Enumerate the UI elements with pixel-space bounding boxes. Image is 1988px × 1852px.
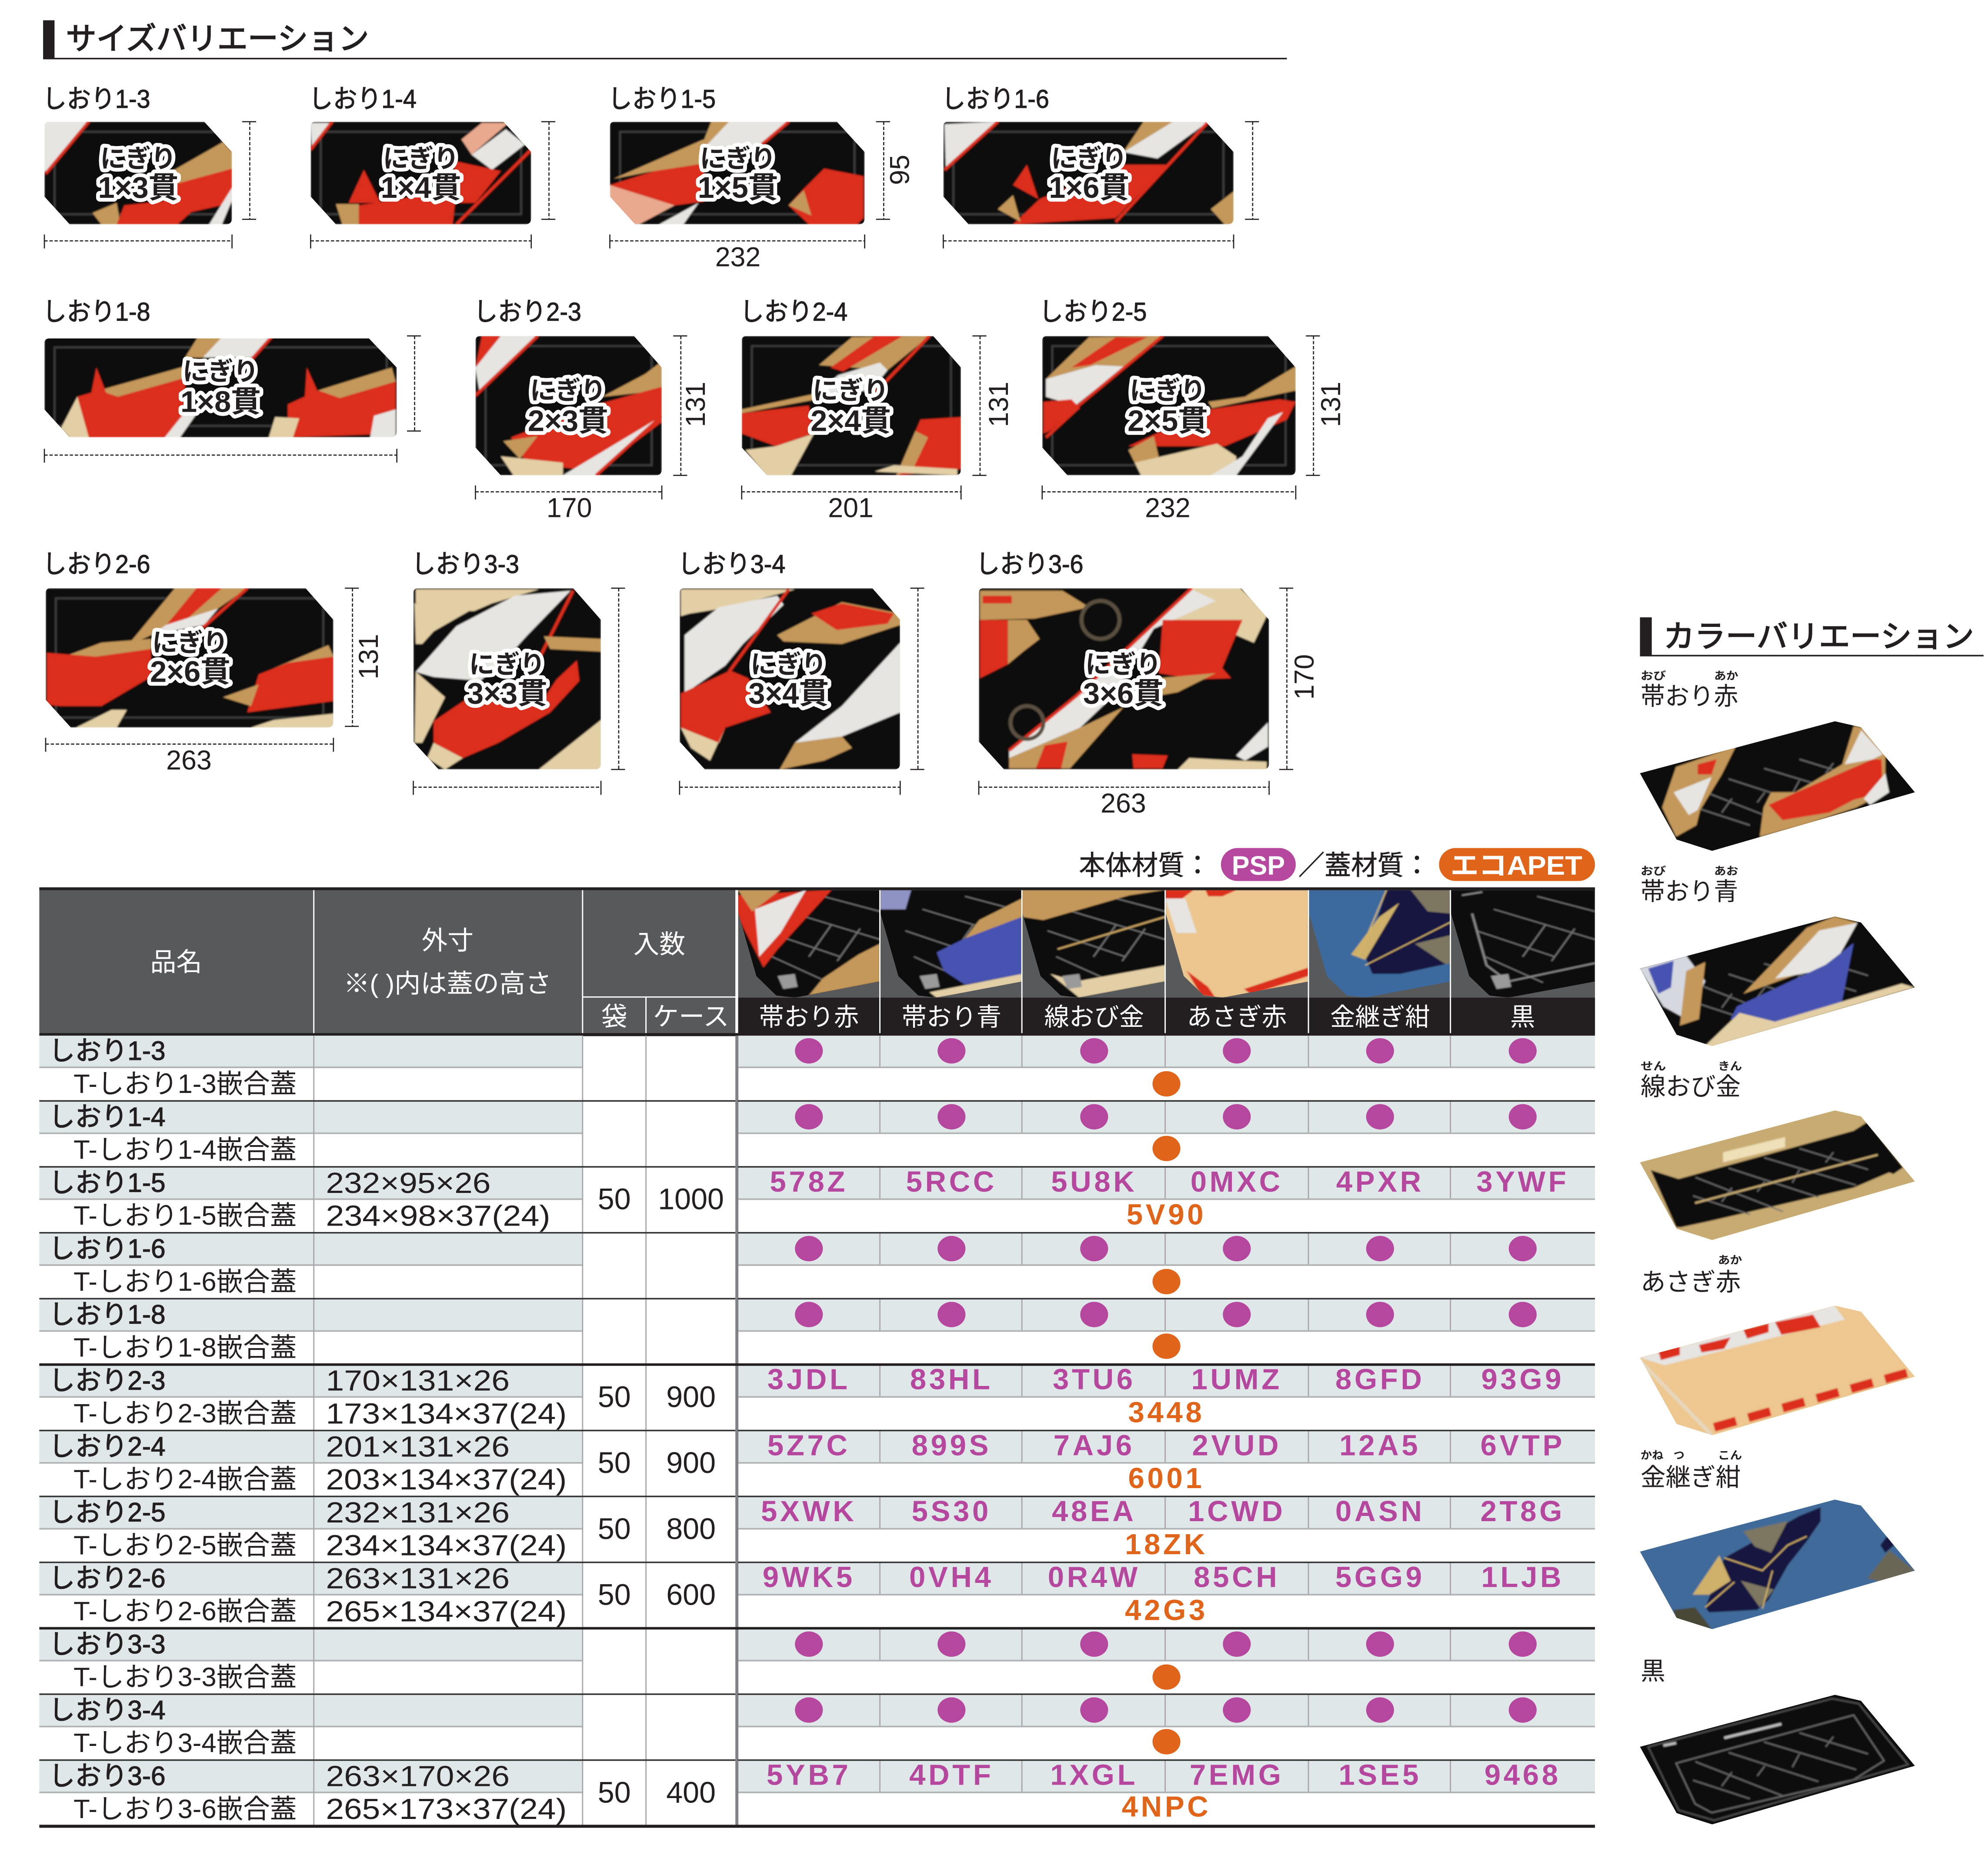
product codes: 5Z7C (767, 1429, 851, 1462)
availability dots (795, 1302, 1537, 1359)
colour item: 帯おり青: 帯おり青 (1641, 878, 1738, 906)
size item: しおり3-3: しおり3-3 (411, 550, 519, 579)
row: しおり2-3: 170×131×26 (326, 1365, 510, 1397)
row: しおり2-6: T-しおり2-6嵌合蓋 (73, 1596, 297, 1626)
product codes: 5YB7 (767, 1759, 851, 1791)
badge: PSP: PSP (1232, 851, 1285, 880)
row: しおり1-5: 1000 (658, 1183, 724, 1216)
product codes: 899S (912, 1429, 991, 1462)
colour item: 黒: 黒 (1641, 1658, 1665, 1685)
width dimension 263 (979, 781, 1269, 819)
header label: 入数: 入数 (633, 930, 685, 959)
depth dimension 131 (972, 336, 1014, 475)
row: しおり2-5: 800 (666, 1512, 716, 1546)
width dimension 232 (610, 234, 865, 272)
product codes: 3448 (1128, 1396, 1205, 1429)
row: しおり1-4 (49, 1102, 1537, 1165)
width dimension 170 (475, 486, 662, 523)
size item: しおり1-8: しおり1-8 (43, 297, 150, 326)
product codes: 4NPC (1122, 1790, 1211, 1823)
heading: colour variations: カラーバリエーション (1664, 620, 1974, 654)
thumbnail: 帯おり赤 (738, 890, 880, 998)
product codes: 5V90 (1127, 1199, 1206, 1231)
row: しおり1-5: 50 (598, 1183, 631, 1216)
tray label: にぎり (751, 650, 827, 679)
tray label (150, 629, 230, 689)
product codes: 1SE5 (1338, 1759, 1421, 1791)
product codes: 2T8G (1481, 1495, 1565, 1528)
product codes: 1LJB (1481, 1561, 1564, 1594)
thumbnail: 線おび金 (1022, 890, 1165, 998)
size item: しおり3-4 (678, 550, 924, 795)
product codes (763, 1561, 1564, 1626)
size item: しおり2-5 (1039, 297, 1346, 523)
tray label (528, 376, 608, 437)
tray photo: しおり3-3 (414, 588, 601, 769)
width dimension (680, 781, 900, 795)
tray label: にぎり (813, 376, 889, 405)
row: しおり2-3: 173×134×37(24) (326, 1397, 567, 1430)
row: しおり2-5: 50 (598, 1512, 631, 1546)
tray label (1083, 650, 1164, 710)
badge: エコAPET: エコAPET (1451, 851, 1582, 880)
row: しおり2-3 (49, 1363, 1564, 1430)
row: しおり2-3: 900 (666, 1381, 716, 1414)
tray label (180, 358, 261, 419)
colour item: 線おび金: せん (1641, 1060, 1666, 1073)
depth dimension 131: 131 (1316, 382, 1346, 427)
tray label: 2×6貫 (150, 655, 230, 689)
size item: しおり1-8 (43, 297, 421, 463)
row: しおり1-5: 234×98×37(24) (326, 1200, 550, 1232)
thumbnail: 帯おり青 (880, 890, 1022, 998)
width dimension 232 (1042, 486, 1296, 523)
material legend (1079, 848, 1595, 881)
row: しおり2-4: 50 (598, 1446, 631, 1479)
colour names: あさぎ赤 (1187, 1003, 1287, 1031)
badge: PSP (1221, 848, 1296, 881)
depth dimension 131: 131 (680, 382, 711, 427)
product codes: 3YWF (1476, 1166, 1569, 1198)
product codes: 5RCC (906, 1166, 997, 1198)
tray label: にぎり (100, 145, 176, 173)
header label: 袋: 袋 (601, 1002, 627, 1031)
width dimension 263: 263 (166, 745, 212, 776)
availability dots (795, 1632, 1537, 1690)
row: しおり2-4: 203×134×37(24) (326, 1463, 567, 1496)
width dimension (44, 449, 397, 463)
row: しおり3-6: 50 (598, 1776, 631, 1809)
width dimension 232: 232 (1145, 493, 1191, 523)
product codes: 48EA (1052, 1495, 1137, 1528)
row: しおり2-6: 265×134×37(24) (326, 1595, 567, 1628)
row: しおり2-5: しおり2-5 (49, 1498, 166, 1527)
product codes: 3TU6 (1053, 1363, 1136, 1396)
tray label: にぎり (530, 376, 606, 405)
depth dimension 170 (1279, 588, 1320, 769)
depth dimension (911, 588, 924, 769)
colour names: 線おび金 (1044, 1003, 1144, 1031)
colour item: 金継ぎ紺: かね (1641, 1449, 1664, 1462)
tray photo: 帯おり赤 (1635, 716, 1921, 856)
availability dots (795, 1236, 1537, 1294)
size item: しおり3-4: しおり3-4 (678, 550, 785, 579)
product codes: 7AJ6 (1054, 1429, 1135, 1462)
row: しおり1-5: 232×95×26 (326, 1167, 490, 1199)
tray photo: 帯おり青 (1635, 911, 1921, 1051)
row: しおり3-4: T-しおり3-4嵌合蓋 (73, 1728, 297, 1758)
depth dimension 131: 131 (354, 634, 384, 680)
row: しおり1-6 (49, 1234, 1537, 1296)
row: しおり1-5: T-しおり1-5嵌合蓋 (73, 1201, 297, 1230)
tray label: 1×8貫 (180, 385, 261, 419)
material legend: ／蓋材質： (1298, 850, 1430, 881)
product codes: 4DTF (909, 1759, 994, 1791)
row: しおり3-3: T-しおり3-3嵌合蓋 (73, 1662, 297, 1692)
colour item: 帯おり赤: 帯おり赤 (1641, 683, 1738, 710)
section: colour variations (1635, 617, 1984, 1829)
row: しおり3-3 (49, 1629, 1537, 1692)
product codes: 5U8K (1051, 1166, 1137, 1198)
row: しおり3-4 (49, 1695, 1537, 1758)
colour item: あさぎ赤: あさぎ赤 (1641, 1269, 1741, 1296)
tray photo: 黒 (1635, 1690, 1921, 1829)
row: しおり3-6: 265×173×37(24) (326, 1793, 567, 1825)
product codes (761, 1495, 1565, 1561)
row: しおり1-4: T-しおり1-4嵌合蓋 (73, 1135, 297, 1165)
product codes: 93G9 (1481, 1363, 1564, 1396)
heading: size variations: サイズバリエーション (66, 22, 369, 57)
row: しおり3-6: しおり3-6 (49, 1761, 166, 1791)
tray photo: あさぎ赤 (1635, 1301, 1921, 1440)
product codes: 0ASN (1335, 1495, 1425, 1528)
colour item: 金継ぎ紺: 金継ぎ紺 (1641, 1464, 1741, 1491)
tray photo: 線おび金 (1635, 1106, 1921, 1245)
product codes (767, 1759, 1561, 1823)
size item: しおり1-4 (309, 84, 555, 248)
tray label: にぎり (152, 629, 228, 657)
product codes: 578Z (770, 1166, 848, 1198)
width dimension (943, 234, 1234, 248)
row: しおり3-4: しおり3-4 (49, 1695, 166, 1725)
row: しおり1-5 (49, 1166, 1569, 1232)
colour item: 帯おり赤 (1635, 670, 1921, 856)
product codes (767, 1429, 1565, 1495)
product codes (770, 1166, 1569, 1231)
header label: 外寸: 外寸 (422, 926, 474, 955)
product codes: 7EMG (1190, 1759, 1284, 1791)
size item: しおり1-4: しおり1-4 (309, 84, 417, 113)
row: しおり2-6 (49, 1561, 1564, 1628)
tray label (1127, 376, 1208, 437)
depth dimension (407, 336, 421, 431)
row: しおり2-4: T-しおり2-4嵌合蓋 (73, 1465, 297, 1494)
row: しおり3-6: 263×170×26 (326, 1760, 510, 1792)
size item: しおり2-5: しおり2-5 (1039, 297, 1147, 326)
colour item: 線おび金: きん (1718, 1060, 1742, 1073)
colour item: 金継ぎ紺: つ (1674, 1449, 1684, 1462)
width dimension 201: 201 (828, 493, 874, 523)
tray label: 1×3貫 (98, 171, 178, 204)
tray photo: しおり2-4 (742, 336, 961, 475)
row: しおり2-5 (49, 1495, 1565, 1562)
product codes: 1UMZ (1191, 1363, 1282, 1396)
tray label: 3×6貫 (1083, 676, 1164, 710)
product codes (767, 1363, 1564, 1429)
tray label: 1×6貫 (1049, 171, 1129, 204)
colour item: 帯おり赤: おび (1641, 670, 1666, 682)
tray photo: しおり1-8 (44, 336, 397, 437)
width dimension 201 (742, 486, 961, 523)
tray photo: しおり2-6 (46, 588, 334, 728)
row: しおり1-3: T-しおり1-3嵌合蓋 (73, 1069, 297, 1099)
tray photo: しおり1-6 (943, 122, 1234, 224)
size item: しおり1-3 (43, 84, 256, 248)
colour item: 線おび金 (1635, 1060, 1921, 1245)
section: size variations (43, 20, 1346, 819)
size item: しおり2-3: しおり2-3 (474, 297, 581, 326)
spec table (39, 887, 1595, 1828)
tray photo: しおり1-3 (44, 122, 232, 224)
colour item: 金継ぎ紺 (1635, 1449, 1921, 1634)
tray label: にぎり (1085, 650, 1161, 679)
width dimension (310, 234, 531, 248)
width dimension 263 (46, 738, 334, 776)
colour names: 帯おり赤 (759, 1003, 859, 1031)
depth dimension 131 (345, 588, 384, 726)
size item: しおり2-4: しおり2-4 (740, 297, 847, 326)
size item: しおり3-3 (411, 550, 625, 795)
tray label: 2×3貫 (528, 404, 608, 437)
tray label (698, 145, 778, 204)
tray label: 1×5貫 (698, 171, 778, 204)
colour item: 黒 (1635, 1658, 1921, 1829)
tray label: 1×4貫 (381, 171, 461, 204)
tray label: にぎり (1130, 376, 1206, 405)
availability dots (795, 1104, 1537, 1161)
row: しおり2-4: しおり2-4 (49, 1432, 166, 1461)
row: しおり2-6: 50 (598, 1578, 631, 1611)
tray photo: しおり3-6 (979, 588, 1269, 769)
tray label: 3×4貫 (748, 676, 829, 710)
header note: ※( )内は蓋の高さ (344, 969, 551, 998)
product codes: 0MXC (1191, 1166, 1283, 1198)
row: しおり2-4 (49, 1429, 1565, 1496)
row: しおり1-4: しおり1-4 (49, 1102, 166, 1132)
size item: しおり1-3: しおり1-3 (43, 84, 150, 113)
row: しおり1-3 (49, 1036, 1537, 1099)
row: しおり1-6: しおり1-6 (49, 1234, 166, 1263)
tray photo: しおり1-4 (310, 122, 531, 224)
tray label: にぎり (1051, 145, 1127, 173)
tray label: にぎり (383, 145, 459, 173)
product codes: 9468 (1484, 1759, 1561, 1791)
thumbnail: 金継ぎ紺 (1308, 890, 1451, 998)
product codes: 9WK5 (763, 1561, 855, 1594)
tray photo: しおり2-3 (475, 336, 662, 475)
tray photo: しおり3-4 (680, 588, 900, 769)
product codes: 5S30 (912, 1495, 991, 1528)
colour item: 帯おり赤: あか (1714, 670, 1738, 682)
row: しおり3-6: T-しおり3-6嵌合蓋 (73, 1794, 297, 1824)
thumbnail: 黒 (1451, 890, 1595, 998)
size item: しおり1-5: しおり1-5 (608, 84, 716, 113)
tray photo: 金継ぎ紺 (1635, 1495, 1921, 1634)
tray label (748, 650, 829, 710)
tray label: にぎり (700, 145, 776, 173)
row: しおり2-3: 50 (598, 1381, 631, 1414)
row: しおり2-4: 900 (666, 1446, 716, 1479)
tray label (1049, 145, 1129, 204)
depth dimension (242, 122, 256, 219)
product codes: 12A5 (1339, 1429, 1421, 1462)
row: しおり3-3: しおり3-3 (49, 1629, 166, 1659)
product codes: 42G3 (1125, 1594, 1208, 1626)
row: しおり1-8 (49, 1300, 1537, 1362)
colour item: あさぎ赤: あか (1718, 1254, 1742, 1266)
colour item: 帯おり青 (1635, 865, 1921, 1051)
product codes: 5GG9 (1335, 1561, 1425, 1594)
size item: しおり2-4 (740, 297, 1014, 523)
product codes: 0R4W (1048, 1561, 1141, 1594)
material legend: 本体材質： (1079, 850, 1211, 881)
product codes: 3JDL (767, 1363, 851, 1396)
tray label: 3×3貫 (467, 676, 547, 710)
product codes: 18ZK (1125, 1528, 1208, 1561)
row: しおり1-6: T-しおり1-6嵌合蓋 (73, 1267, 297, 1296)
size item: しおり1-6: しおり1-6 (941, 84, 1049, 113)
product codes: 85CH (1194, 1561, 1280, 1594)
depth dimension 131 (673, 336, 711, 475)
size item: しおり2-6 (43, 550, 384, 776)
product codes: 4PXR (1336, 1166, 1424, 1198)
row: しおり3-6 (49, 1759, 1561, 1825)
depth dimension 95: 95 (885, 155, 915, 185)
row: しおり2-5: 232×131×26 (326, 1496, 510, 1529)
width dimension (414, 781, 601, 795)
table shading (39, 1036, 1595, 1828)
row: しおり2-6: 600 (666, 1578, 716, 1611)
colour item: 帯おり青: あお (1714, 865, 1738, 877)
tray label (467, 650, 547, 710)
depth dimension 95 (876, 122, 915, 219)
availability dots (795, 1697, 1537, 1754)
tray photo: しおり1-5 (610, 122, 865, 224)
depth dimension (611, 588, 625, 769)
size item: しおり3-6: しおり3-6 (976, 550, 1084, 579)
row: しおり2-5: 234×134×37(24) (326, 1529, 567, 1562)
tray label: 2×5貫 (1127, 404, 1208, 437)
row: しおり2-4: 201×131×26 (326, 1430, 510, 1463)
row: しおり2-3: T-しおり2-3嵌合蓋 (73, 1399, 297, 1428)
colour item: 金継ぎ紺: こん (1718, 1449, 1742, 1462)
width dimension (44, 234, 232, 248)
product codes: 83HL (910, 1363, 993, 1396)
heading: size variations (43, 20, 1287, 59)
table header (39, 887, 1595, 1036)
row: しおり2-5: T-しおり2-5嵌合蓋 (73, 1530, 297, 1560)
size item: しおり1-6 (941, 84, 1259, 248)
product codes: 6001 (1128, 1462, 1205, 1495)
row: しおり2-6: しおり2-6 (49, 1563, 166, 1593)
size item: しおり3-6 (976, 550, 1320, 819)
colour item: 帯おり青: おび (1641, 865, 1666, 877)
depth dimension 170: 170 (1289, 654, 1320, 699)
row: しおり1-8: T-しおり1-8嵌合蓋 (73, 1333, 297, 1362)
product codes: 5XWK (761, 1495, 857, 1528)
width dimension 232: 232 (715, 242, 761, 272)
depth dimension (541, 122, 555, 219)
row: しおり1-5: しおり1-5 (49, 1168, 166, 1197)
product codes: 1XGL (1050, 1759, 1138, 1791)
size item: しおり2-3 (474, 297, 711, 523)
tray photo: しおり2-5 (1042, 336, 1296, 475)
colour names (759, 1003, 1535, 1031)
depth dimension 131: 131 (984, 382, 1014, 427)
row: しおり3-6: 400 (666, 1776, 716, 1809)
product codes: 1CWD (1188, 1495, 1285, 1528)
header label: ケース: ケース (653, 1002, 729, 1031)
tray label: にぎり (469, 650, 545, 679)
row: しおり1-8: しおり1-8 (49, 1300, 166, 1329)
product codes: 6VTP (1481, 1429, 1565, 1462)
colour names: 金継ぎ紺 (1330, 1003, 1430, 1031)
colour names: 黒 (1510, 1003, 1535, 1031)
size item: しおり2-6: しおり2-6 (43, 550, 150, 579)
size item: しおり1-5 (608, 84, 915, 272)
product codes: 0VH4 (909, 1561, 994, 1594)
colour item: 線おび金: 線おび金 (1641, 1073, 1741, 1101)
tray label: 2×4貫 (811, 404, 891, 437)
tray label (381, 145, 461, 204)
tray label (98, 145, 178, 204)
product codes: 8GFD (1335, 1363, 1425, 1396)
depth dimension 131 (1306, 336, 1346, 475)
tray label (811, 376, 891, 437)
width dimension 170: 170 (547, 493, 592, 523)
tray label: にぎり (183, 358, 259, 386)
thumbnail: あさぎ赤 (1165, 890, 1308, 998)
depth dimension (1245, 122, 1259, 219)
width dimension 263: 263 (1101, 788, 1146, 819)
product codes: 2VUD (1192, 1429, 1281, 1462)
row: しおり1-3: しおり1-3 (49, 1036, 166, 1066)
row: しおり2-3: しおり2-3 (49, 1366, 166, 1395)
colour item: あさぎ赤 (1635, 1254, 1921, 1440)
availability dots (795, 1038, 1537, 1096)
row: しおり2-6: 263×131×26 (326, 1562, 510, 1595)
header label: 品名: 品名 (150, 948, 202, 977)
colour names: 帯おり青 (901, 1003, 1001, 1031)
